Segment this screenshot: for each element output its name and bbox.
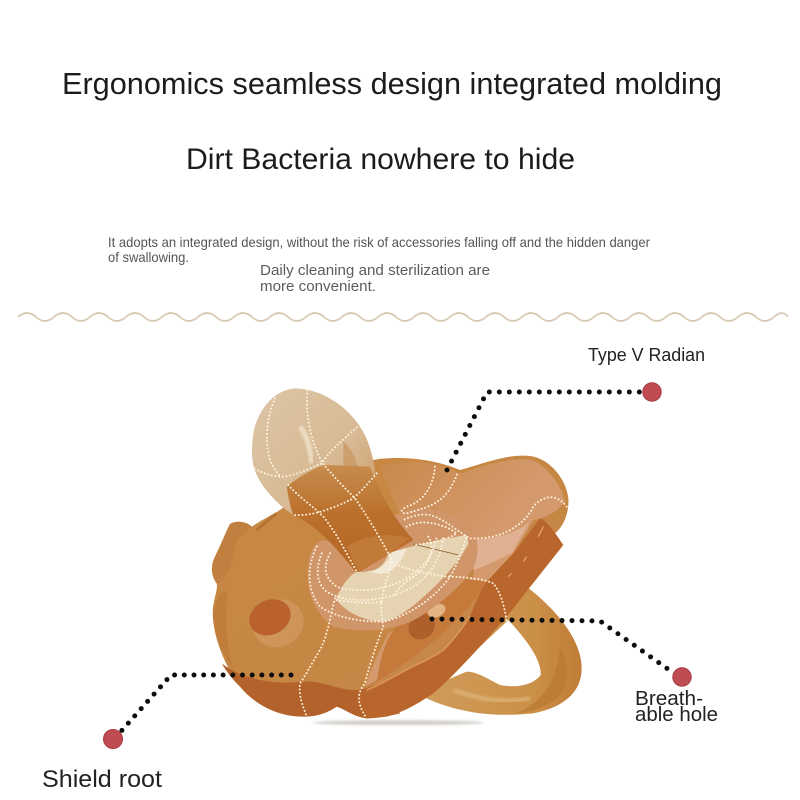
cleaning note: Daily cleaning and sterilization are <box>260 262 490 279</box>
callout: Breathable hole <box>432 619 718 726</box>
cleaning note <box>260 262 490 295</box>
label <box>635 688 718 726</box>
title line 2: Dirt Bacteria nowhere to hide <box>186 143 575 176</box>
label: able hole <box>635 704 718 726</box>
description paragraph <box>108 234 650 265</box>
callout: Shield root <box>42 675 291 793</box>
leader dots <box>432 619 672 672</box>
ridge highlight <box>257 513 277 530</box>
rim band <box>359 518 563 718</box>
shield body <box>212 456 568 718</box>
callout: Type V Radian <box>447 345 705 470</box>
marker <box>673 668 691 686</box>
description paragraph: It adopts an integrated design, without the risk of accessories falling off and the hidden danger <box>108 234 650 250</box>
pacifier illustration <box>212 388 582 725</box>
rim tab marks <box>508 527 543 577</box>
label: Breath- <box>635 688 703 710</box>
handle ring <box>420 587 582 715</box>
white dotted contour lines <box>253 390 567 718</box>
right face highlight <box>473 522 530 570</box>
marker <box>643 383 661 401</box>
label: Type V Radian <box>588 345 705 365</box>
ground shadow <box>312 720 484 725</box>
wall below centre disc <box>377 578 488 682</box>
cream center disc <box>337 535 469 622</box>
nubs at left edge <box>212 522 252 583</box>
label: Shield root <box>42 766 162 793</box>
marker <box>104 730 122 748</box>
leader dots <box>447 392 642 470</box>
leader dots <box>116 675 291 737</box>
description paragraph: of swallowing. <box>108 249 189 265</box>
nipple stem <box>287 465 413 573</box>
vent hole left <box>243 590 313 657</box>
cleaning note: more convenient. <box>260 278 376 295</box>
rim highlight <box>367 617 470 690</box>
dark lower shield band <box>222 663 400 718</box>
title line 1: Ergonomics seamless design integrated molding <box>62 66 722 101</box>
vent hole right <box>403 601 448 645</box>
inner right shield face <box>365 459 565 687</box>
collar around centre <box>308 508 478 630</box>
nipple bulb <box>252 388 375 515</box>
crease at left edge <box>213 592 233 668</box>
